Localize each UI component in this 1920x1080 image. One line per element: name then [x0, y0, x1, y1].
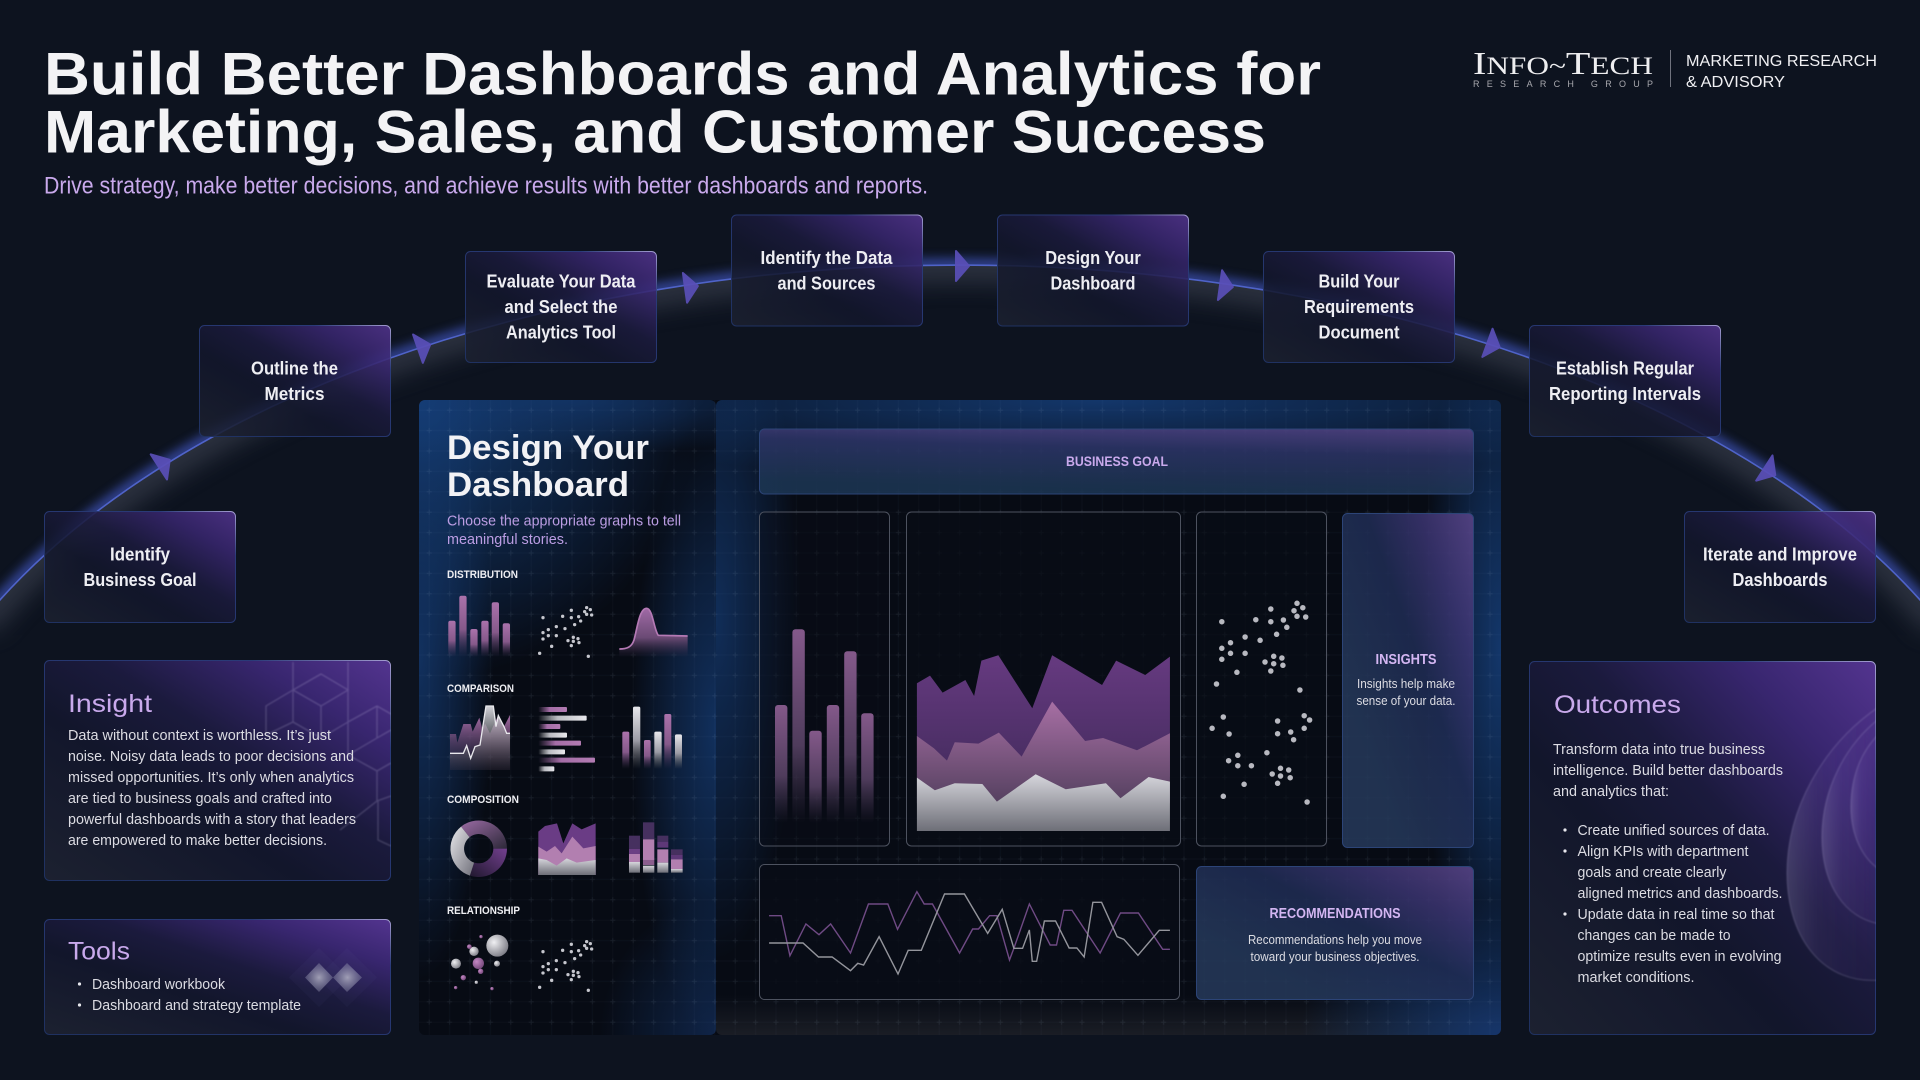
step: Outline the Metrics: Outline the [251, 358, 338, 379]
panel: Insight [44, 660, 391, 880]
logo: RESEARCH GROUP [1473, 79, 1653, 89]
step: Design Your Dashboard: Design Your [1045, 247, 1141, 268]
insights card: INSIGHTS [1376, 652, 1437, 668]
logo: MARKETING RESEARCH [1686, 53, 1877, 70]
panel: main dashboard [419, 400, 1501, 1035]
bullet list [1563, 822, 1782, 986]
arrow 2 [413, 330, 435, 363]
chart: comparison horizontal bars [538, 707, 595, 771]
bullet list: goals and create clearly [1578, 864, 1727, 881]
step: Iterate and Improve Dashboards [1684, 512, 1876, 622]
panel: Tools [44, 920, 390, 1034]
body text: are empowered to make better decisions. [68, 832, 327, 849]
panel: Outcomes [1530, 662, 1880, 1034]
body text: Data without context is worthless. It’s just [68, 727, 332, 744]
chart: bubbles [451, 935, 508, 990]
heading: Tools [68, 938, 130, 966]
step: Identify the Data and Sources [732, 215, 922, 326]
logo [1473, 45, 1877, 91]
title: Marketing, Sales, and Customer Success [44, 98, 1266, 166]
arrow 1 [151, 447, 178, 480]
left column: chart guide [447, 429, 688, 990]
arrow 7 [1756, 455, 1783, 488]
step: Evaluate Your Data [466, 252, 656, 362]
bullet list: Align KPIs with department [1578, 843, 1749, 860]
recommendations card [1196, 866, 1474, 1000]
step: Establish Regular Reporting Intervals: Reporting Intervals [1549, 383, 1701, 404]
logo: INFO~ TECH [1473, 45, 1653, 81]
description [447, 512, 681, 548]
body text: missed opportunities. It’s only when analytics [68, 769, 354, 786]
business goal banner [760, 429, 1474, 494]
arrow 6 [1482, 329, 1505, 361]
body text [68, 727, 356, 849]
business goal banner: BUSINESS GOAL [1066, 453, 1168, 469]
step: Evaluate Your Data: Analytics Tool [506, 322, 616, 343]
step: Identify Business Goal: Business Goal [84, 569, 196, 590]
step: Identify Business Goal [44, 512, 236, 622]
insights card: Insights help make [1357, 676, 1455, 691]
bullet list: Dashboard and strategy template [92, 997, 301, 1014]
chart: distribution curve [619, 608, 688, 657]
chart: stacked area [538, 823, 596, 875]
intro text [1553, 741, 1783, 800]
subtitle: Drive strategy, make better decisions, and achieve results with better dashboards and reports. [44, 172, 928, 200]
step: Evaluate Your Data: Evaluate Your Data [486, 271, 636, 292]
label: relationship: RELATIONSHIP [447, 905, 520, 917]
chart: stacked bars [629, 822, 683, 873]
step: Outline the Metrics: Metrics [264, 383, 324, 404]
intro text: and analytics that: [1553, 783, 1669, 800]
recommendations card: RECOMMENDATIONS [1270, 906, 1401, 922]
recommendations card: toward your business objectives. [1250, 949, 1420, 964]
chart: tall bars [760, 512, 890, 846]
body text: powerful dashboards with a story that leaders [68, 811, 356, 828]
heading: Outcomes [1554, 691, 1681, 719]
bullet list: market conditions. [1578, 969, 1694, 986]
bullet list: Dashboard workbook [92, 976, 225, 993]
step: Iterate and Improve Dashboards: Dashboards [1732, 569, 1828, 590]
bullet list: aligned metrics and dashboards. [1578, 885, 1782, 902]
label: composition: COMPOSITION [447, 794, 519, 806]
bullet list: changes can be made to [1578, 927, 1730, 944]
body text: noise. Noisy data leads to poor decisions and [68, 748, 354, 765]
description: meaningful stories. [447, 531, 568, 548]
bullet list [78, 976, 301, 1014]
heading: Insight [68, 690, 152, 718]
icon: hexagon cubes [266, 662, 391, 846]
logo: & ADVISORY [1686, 74, 1785, 91]
chart: comparison vertical bars [622, 707, 682, 769]
step: Build Your Requirements Document: Build Your [1318, 271, 1400, 292]
insights card: sense of your data. [1356, 693, 1456, 708]
chart: line chart [760, 864, 1180, 1000]
step: Build Your Requirements Document: Document [1318, 322, 1400, 343]
heading: Design Your [447, 429, 649, 467]
bullet list: optimize results even in evolving [1578, 948, 1782, 965]
step: Establish Regular Reporting Intervals [1530, 326, 1720, 436]
step: Build Your Requirements Document: Requirements [1304, 296, 1414, 317]
intro text: intelligence. Build better dashboards [1553, 762, 1783, 779]
chart: layered area [906, 512, 1180, 846]
chart: donut [450, 820, 507, 877]
step: Design Your Dashboard: Dashboard [1050, 273, 1136, 294]
arrow 4 [956, 251, 969, 281]
heading: Dashboard [447, 466, 629, 504]
bullet list: Create unified sources of data. [1578, 822, 1770, 839]
bullet list: Update data in real time so that [1578, 906, 1775, 923]
arc: process path [0, 265, 1920, 623]
icon: concentric ovals [1787, 706, 1880, 980]
chart: curve outline [619, 608, 688, 649]
recommendations card: Recommendations help you move [1248, 932, 1422, 947]
label: comparison: COMPARISON [447, 683, 514, 695]
title: Build Better Dashboards and Analytics for [44, 40, 1321, 108]
description: Choose the appropriate graphs to tell [447, 512, 681, 530]
step: Identify Business Goal: Identify [110, 544, 171, 565]
step: Evaluate Your Data: and Select the [504, 296, 618, 317]
heading [447, 429, 649, 504]
chart: comparison areas [450, 706, 510, 770]
step: Build Your Requirements Document [1264, 252, 1454, 362]
chart: relationship scatter [540, 942, 592, 990]
arrow 5 [1218, 270, 1235, 302]
insights card [1342, 514, 1474, 848]
step: Establish Regular Reporting Intervals: Establish Regular [1556, 358, 1694, 379]
step: Outline the Metrics [200, 326, 390, 436]
chart: large scatter [1196, 512, 1326, 846]
step: Iterate and Improve Dashboards: Iterate and Improve [1703, 544, 1857, 565]
chart: distribution bars [448, 596, 510, 657]
step: Design Your Dashboard [998, 215, 1188, 326]
label: distribution: DISTRIBUTION [447, 569, 518, 581]
chart: distribution scatter [540, 608, 592, 656]
step: Identify the Data and Sources: Identify the Data [760, 247, 893, 268]
icon: diamonds [289, 948, 377, 1007]
intro text: Transform data into true business [1553, 741, 1765, 758]
step: Identify the Data and Sources: and Sources [778, 273, 876, 294]
title [44, 40, 1321, 166]
arrow 3 [683, 271, 700, 303]
body text: are tied to business goals and crafted into [68, 790, 332, 807]
